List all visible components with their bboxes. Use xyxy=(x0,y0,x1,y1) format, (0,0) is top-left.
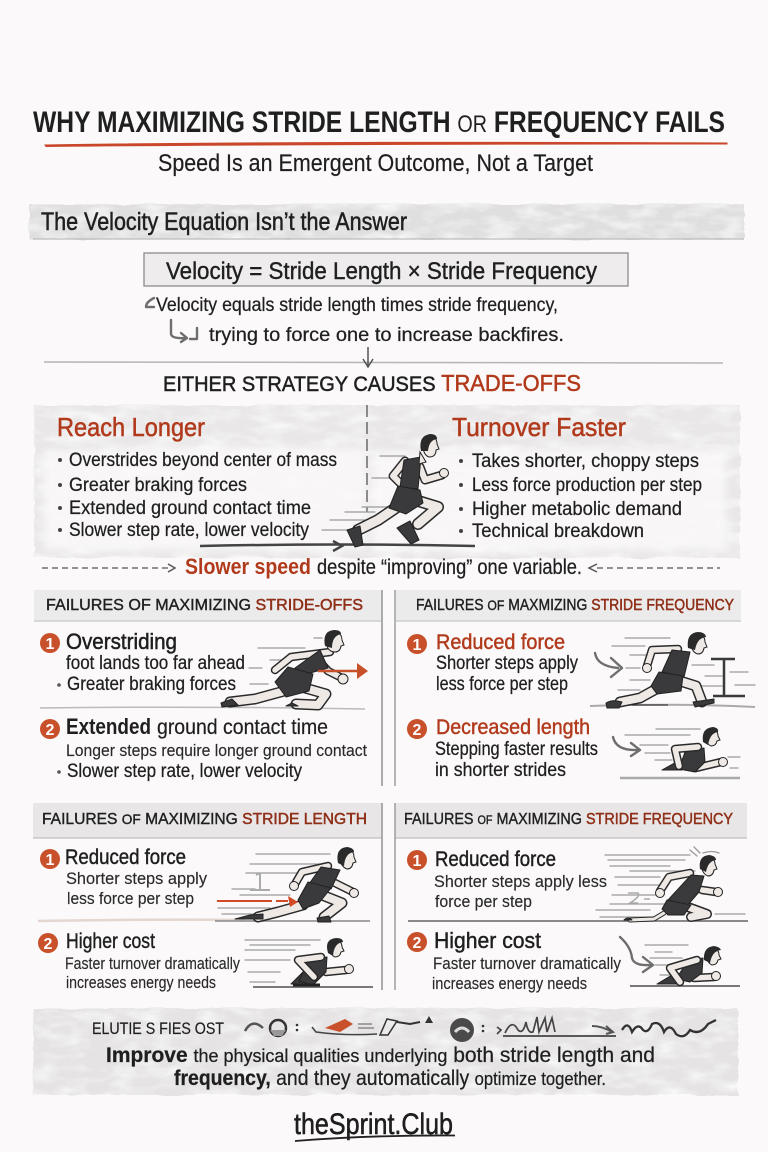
conclusion text: Improve the physical qualities underlying both stride length and xyxy=(106,1044,655,1067)
subtitle: Speed Is an Emergent Outcome, Not a Target xyxy=(158,150,593,177)
item 2: higher cost: increases energy needs xyxy=(432,974,587,993)
left column: reach longer: Slower step rate, lower velocity xyxy=(69,520,309,541)
item 1: reduced force: Reduced force xyxy=(435,848,556,871)
figure: central runner xyxy=(200,434,475,551)
item 1: reduced force xyxy=(407,631,578,695)
item 1: reduced force: Reduced force xyxy=(436,631,565,654)
conclusion text xyxy=(106,1044,655,1090)
equation box: Velocity = Stride Length × Stride Frequency xyxy=(166,258,597,285)
item 2: higher cost: Faster turnover dramatically xyxy=(433,954,621,973)
icon: curved arrow xyxy=(620,937,653,972)
item 2: higher cost: increases energy needs xyxy=(66,973,216,992)
item 2: extended ground contact xyxy=(40,714,367,782)
panel: trade-offs xyxy=(34,405,740,558)
figure: runner with stand xyxy=(590,632,755,708)
item 1: overstriding: foot lands too far ahead xyxy=(66,653,245,674)
item 1: reduced force: Shorter steps apply less xyxy=(434,872,607,891)
divider xyxy=(44,362,723,363)
left column: reach longer xyxy=(57,412,337,541)
arrow: down xyxy=(363,347,373,367)
item 1: reduced force: Reduced force xyxy=(65,846,186,869)
figure: runner with red arrow xyxy=(38,847,370,922)
left column: reach longer: Overstrides beyond center of mass xyxy=(69,450,337,471)
section banner: velocity equation: The Velocity Equation Isn’t the Answer xyxy=(41,208,407,236)
item 2: higher cost: 2 xyxy=(413,935,422,952)
item 2: higher cost xyxy=(38,930,240,992)
item 1: reduced force: 1 xyxy=(413,637,422,654)
item 2: extended ground contact: ground contact time xyxy=(157,716,328,739)
equation explanation: trying to force one to increase backfires. xyxy=(209,325,564,346)
item 2: decreased length: in shorter strides xyxy=(435,760,566,781)
title: WHY MAXIMIZING STRIDE LENGTH OR FREQUENCY FAILS xyxy=(33,106,725,139)
item 1: reduced force: force per step xyxy=(435,892,532,911)
header: FAILURES OF MAXIMIZING STRIDE-OFFS xyxy=(46,597,363,614)
equation explanation: Velocity equals stride length times stride frequency, xyxy=(156,295,558,316)
item 1: reduced force xyxy=(407,848,607,911)
item 1: reduced force: Shorter steps apply xyxy=(436,653,578,674)
figure: runner with speed lines xyxy=(408,847,748,921)
item 1: reduced force: less force per step xyxy=(67,889,194,908)
item 1: overstriding xyxy=(40,629,245,695)
item 1: reduced force: 1 xyxy=(46,852,55,869)
item 2: higher cost xyxy=(407,928,621,993)
item 2: decreased length: Stepping faster results xyxy=(435,739,598,760)
item 2: extended ground contact: 2 xyxy=(46,722,55,739)
figure: small runner crouched xyxy=(620,727,740,778)
item 1: reduced force: less force per step xyxy=(436,674,568,695)
right column: turnover faster xyxy=(452,412,702,542)
right column: turnover faster: Takes shorter, choppy steps xyxy=(472,451,699,472)
takeaway line: slower speed xyxy=(42,554,720,579)
icon: curved arrow small xyxy=(613,737,640,756)
icon: curved arrow xyxy=(595,653,622,677)
panel: failures of maximizing stride frequency (upper) xyxy=(395,590,755,786)
panel: failures of maximizing stride-offs xyxy=(34,590,382,786)
section banner: velocity equation xyxy=(29,204,744,239)
takeaway line: slower speed: Slower speed xyxy=(185,554,311,579)
brand logo: theSprint.Club xyxy=(294,1108,453,1141)
panel: failures of maximizing stride length xyxy=(33,803,382,992)
conclusion text: frequency, and they automatically optimize together. xyxy=(174,1067,606,1090)
item 1: overstriding: Greater braking forces xyxy=(67,674,236,695)
right column: turnover faster: Technical breakdown xyxy=(472,521,644,542)
item 2: higher cost: 2 xyxy=(44,936,53,953)
header: FAILURES OF MAXIMIZING STRIDE FREQUENCY xyxy=(404,811,733,828)
heading: trade-offs: EITHER STRATEGY CAUSES TRADE-OFFS xyxy=(163,370,581,396)
item 2: higher cost: Faster turnover dramatically xyxy=(65,954,240,973)
item 1: reduced force xyxy=(40,846,207,908)
item 1: reduced force: Shorter steps apply xyxy=(66,869,207,888)
left column: reach longer: Greater braking forces xyxy=(69,475,247,496)
item 2: extended ground contact: Slower step rate, lower velocity xyxy=(67,761,302,782)
item 1: overstriding: 1 xyxy=(46,636,55,653)
icon row: symbols xyxy=(245,1016,716,1042)
takeaway line: slower speed: despite “improving” one variable. xyxy=(317,556,582,579)
item 2: decreased length: Decreased length xyxy=(436,716,590,739)
figure: small runner xyxy=(245,938,373,987)
panel: bottom conclusion xyxy=(33,1008,738,1095)
header: FAILURES OF MAXMIZING STRIDE FREQUENCY xyxy=(416,597,734,614)
right column: turnover faster: Turnover Faster xyxy=(452,412,626,442)
item 2: extended ground contact: Extended xyxy=(66,714,151,739)
item 2: higher cost: Higher cost xyxy=(66,930,155,953)
item 1: overstriding: Overstriding xyxy=(66,629,177,654)
figure: crouched runner xyxy=(630,945,740,986)
item 2: decreased length xyxy=(407,716,598,781)
left column: reach longer: Extended ground contact time xyxy=(69,498,311,519)
item 2: higher cost: Higher cost xyxy=(434,928,541,953)
right column: turnover faster: Higher metabolic demand xyxy=(472,499,682,520)
item 1: reduced force: 1 xyxy=(413,853,422,870)
figure: overstriding runner xyxy=(40,630,368,709)
item 2: extended ground contact: Longer steps require longer ground contact xyxy=(66,741,367,760)
left column: reach longer: Reach Longer xyxy=(57,412,205,442)
header: FAILURES OF MAXIMIZING STRIDE LENGTH xyxy=(42,811,367,828)
panel: failures of maximizing stride frequency (lower) xyxy=(395,803,748,993)
small label: ELUTIE S FIES OST xyxy=(92,1019,224,1038)
item 2: decreased length: 2 xyxy=(413,722,422,739)
equation explanation xyxy=(146,295,564,346)
right column: turnover faster: Less force production per step xyxy=(472,475,702,496)
